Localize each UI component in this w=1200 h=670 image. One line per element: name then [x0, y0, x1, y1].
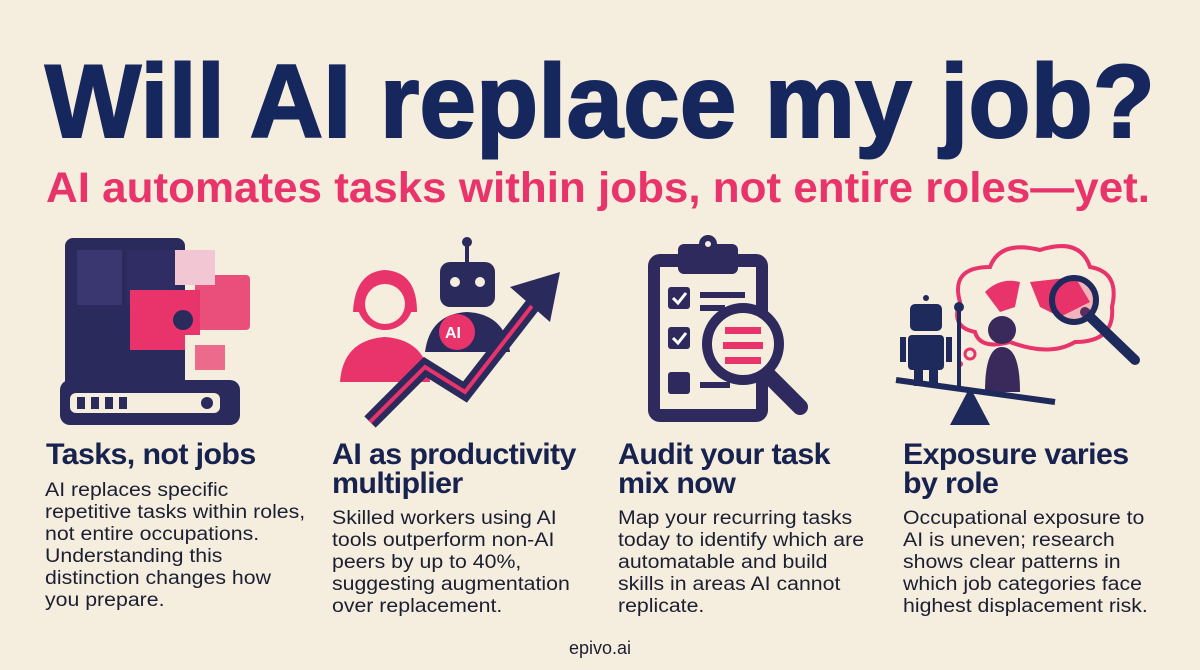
heading: exposure: [903, 438, 1129, 500]
title: AI automates tasks within jobs, not entire roles—yet.: [46, 164, 1150, 212]
text: col4: which job categories face: [903, 574, 1142, 595]
heading: audit: [618, 438, 830, 500]
text: col2: suggesting augmentation: [332, 574, 570, 595]
icon: person robot arrow: AI: [445, 325, 461, 342]
text: col2: Skilled workers using AI: [332, 508, 557, 529]
text: col3: replicate.: [618, 596, 704, 617]
heading: audit: Audit your task: [618, 438, 830, 471]
text: col2: peers by up to 40%,: [332, 552, 521, 573]
text: col1: distinction changes how: [45, 568, 271, 589]
text: col1: repetitive tasks within roles,: [45, 502, 305, 523]
text: col1: [45, 480, 305, 611]
heading: audit: mix now: [618, 467, 735, 500]
footer: epivo.ai: [569, 638, 631, 658]
heading: tasks not jobs: Tasks, not jobs: [46, 438, 256, 471]
text: col4: Occupational exposure to: [903, 508, 1144, 529]
text: col3: Map your recurring tasks: [618, 508, 852, 529]
heading: productivity: AI as productivity: [332, 438, 576, 471]
text: col1: you prepare.: [45, 590, 164, 611]
text: col2: over replacement.: [332, 596, 502, 617]
text: col3: automatable and build: [618, 552, 827, 573]
heading: productivity: multiplier: [332, 467, 463, 500]
text: col1: Understanding this: [45, 546, 222, 567]
text: col4: shows clear patterns in: [903, 552, 1121, 573]
icon: puzzle server: [60, 238, 250, 425]
text: col2: [332, 508, 570, 617]
icon: clipboard magnifier: [648, 235, 808, 422]
text: col4: AI is uneven; research: [903, 530, 1115, 551]
title: [44, 44, 1155, 212]
title: Will AI replace my job?: [45, 44, 1155, 160]
icon: balance robot person cloud: [896, 244, 1140, 425]
icon: person robot arrow: [340, 237, 560, 428]
text: col3: skills in areas AI cannot: [618, 574, 840, 595]
text: col1: AI replaces specific: [45, 480, 228, 501]
text: col3: today to identify which are: [618, 530, 864, 551]
text: col1: not entire occupations.: [45, 524, 259, 545]
heading: exposure: Exposure varies: [903, 438, 1129, 471]
text: col4: highest displacement risk.: [903, 596, 1148, 617]
heading: exposure: by role: [903, 467, 998, 500]
heading: productivity: [332, 438, 576, 500]
text: col2: tools outperform non-AI: [332, 530, 554, 551]
text: col4: [903, 508, 1148, 617]
text: col3: [618, 508, 864, 617]
